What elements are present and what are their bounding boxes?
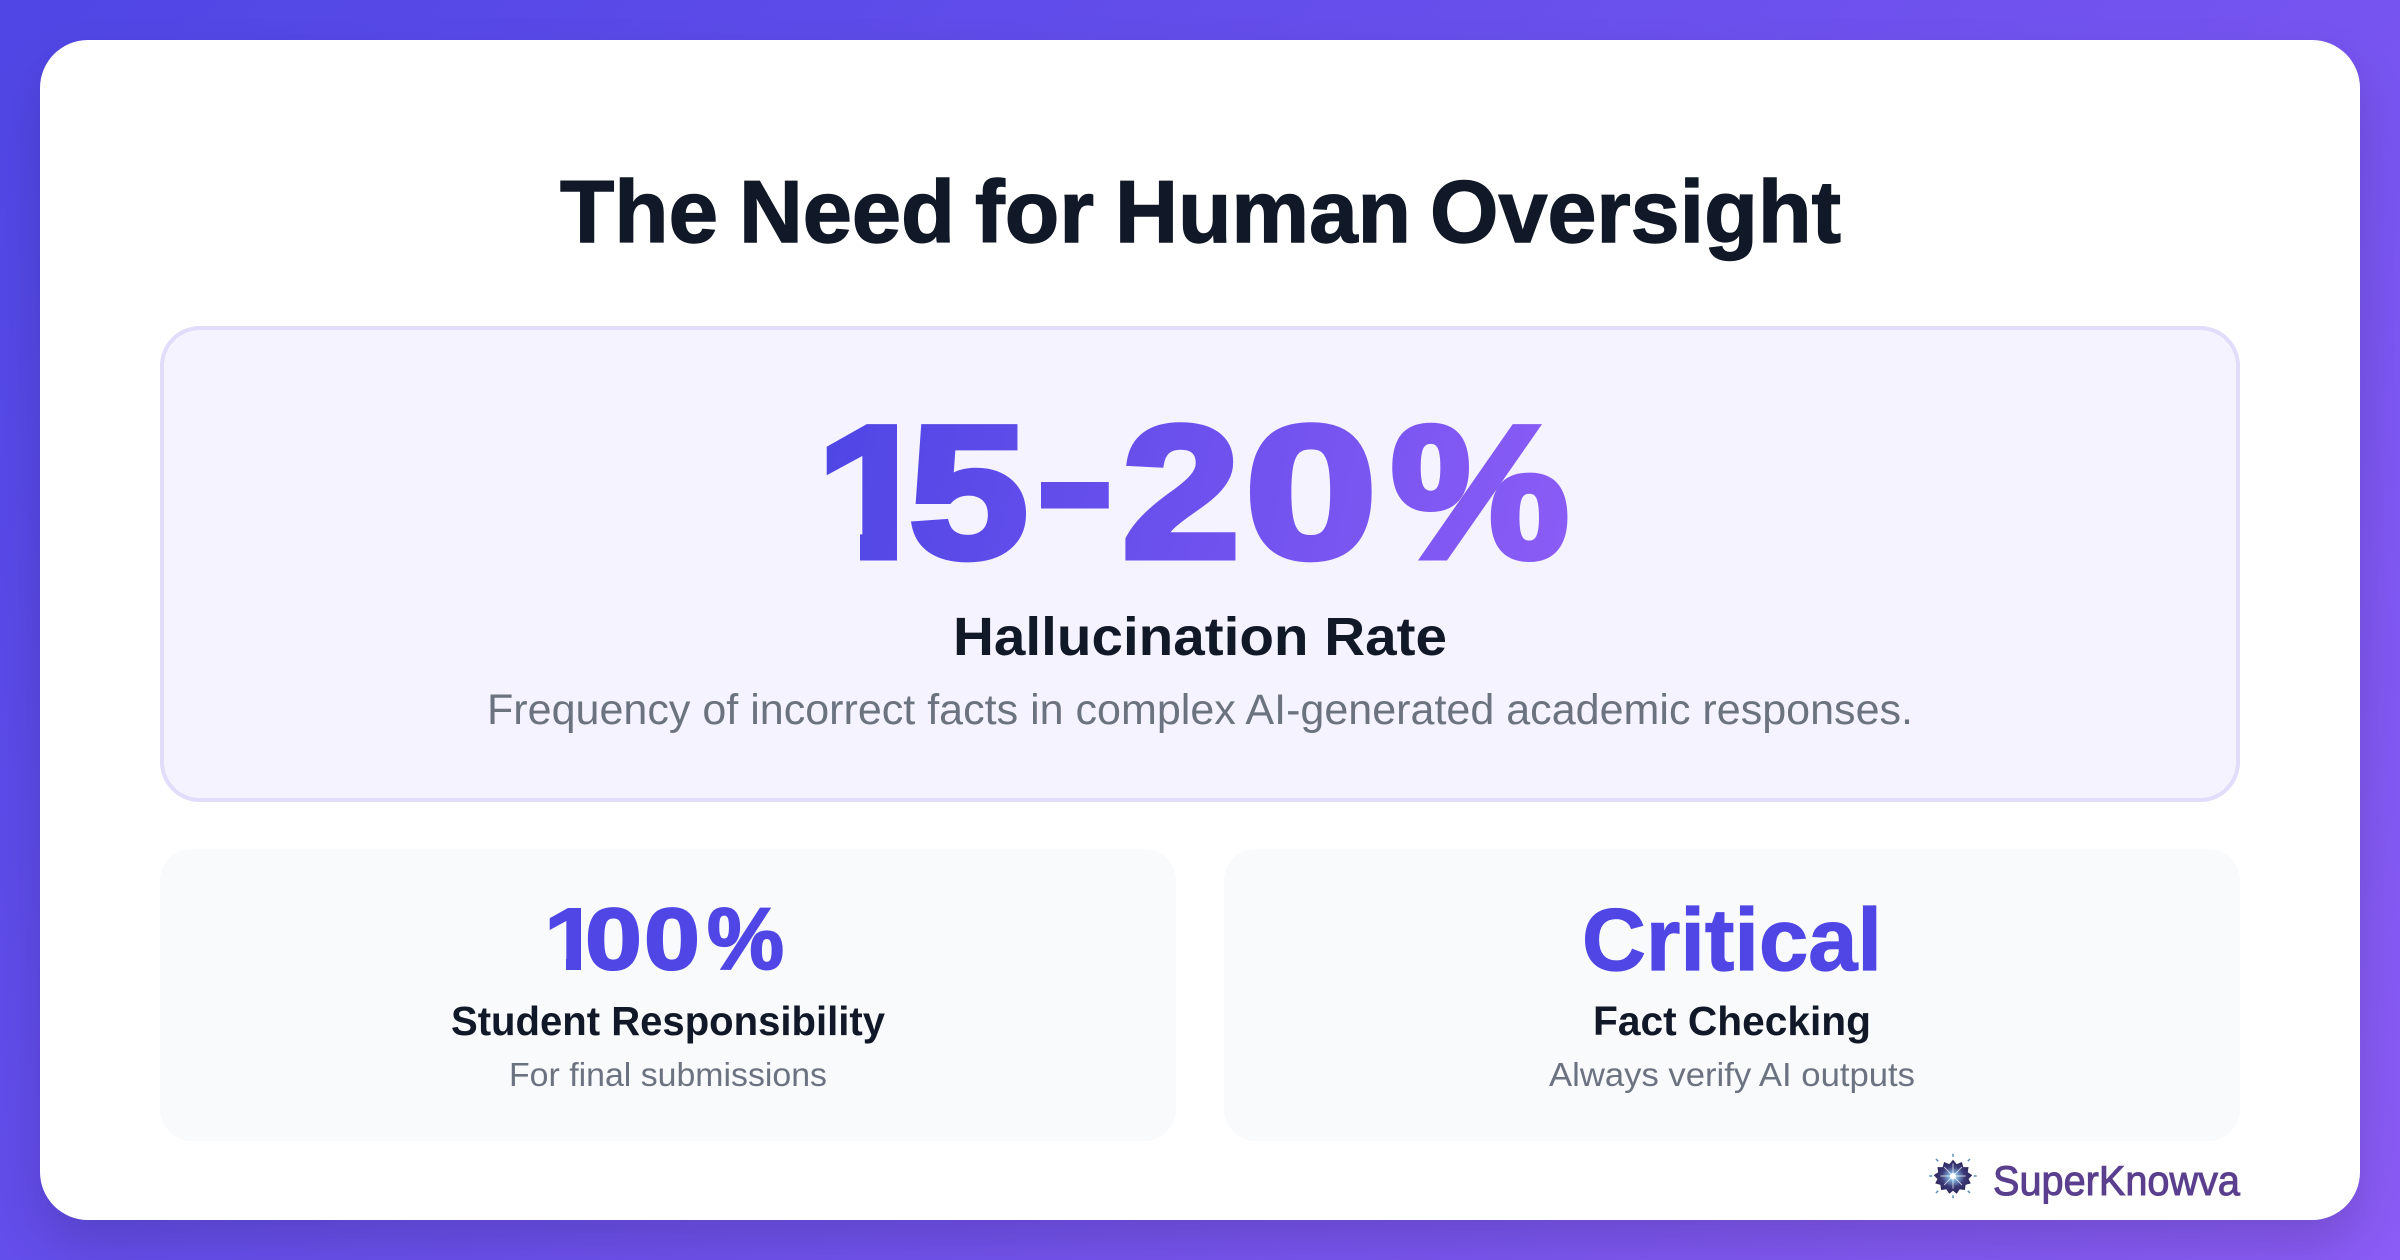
value: 100%: 0 bbox=[644, 891, 700, 988]
brand logo bbox=[1929, 1154, 2241, 1204]
description: For final submissions bbox=[509, 1056, 827, 1093]
value: 100%: 0 bbox=[585, 891, 642, 988]
big statistic: 15-20%: 2 bbox=[1122, 387, 1240, 597]
panel: student responsibility bbox=[452, 907, 885, 1086]
big statistic: 15-20% bbox=[826, 422, 1568, 562]
panel: hallucination rate bbox=[162, 328, 2238, 800]
title bbox=[560, 162, 1841, 261]
big statistic: 15-20%: 0 bbox=[1245, 387, 1377, 597]
big statistic: 15-20%: 5 bbox=[909, 387, 1028, 597]
label: Student Responsibility bbox=[451, 998, 885, 1044]
title: for bbox=[975, 162, 1094, 261]
description: Always verify AI outputs bbox=[1549, 1056, 1915, 1093]
value: Critical: Critical bbox=[1582, 890, 1882, 989]
title: Oversight bbox=[1430, 162, 1841, 261]
title: Human bbox=[1115, 162, 1411, 261]
value: 100% bbox=[550, 907, 783, 971]
title: The bbox=[560, 162, 718, 261]
big statistic: 15-20%: - bbox=[1034, 374, 1116, 584]
stat label: Hallucination Rate bbox=[953, 607, 1447, 667]
panel: fact checking bbox=[1224, 849, 2240, 1141]
icon: star burst bbox=[1929, 1154, 1977, 1198]
title: Need bbox=[739, 162, 955, 261]
big statistic: 15-20%: 1 bbox=[816, 387, 936, 597]
label: Fact Checking bbox=[1593, 998, 1871, 1044]
value: 100%: % bbox=[707, 891, 784, 988]
stat description: Frequency of incorrect facts in complex AI-generated academic responses. bbox=[487, 686, 1913, 734]
big statistic: 15-20%: % bbox=[1391, 387, 1569, 597]
wordmark: SuperKnowva bbox=[1993, 1157, 2241, 1204]
value: 100%: 1 bbox=[544, 891, 600, 988]
